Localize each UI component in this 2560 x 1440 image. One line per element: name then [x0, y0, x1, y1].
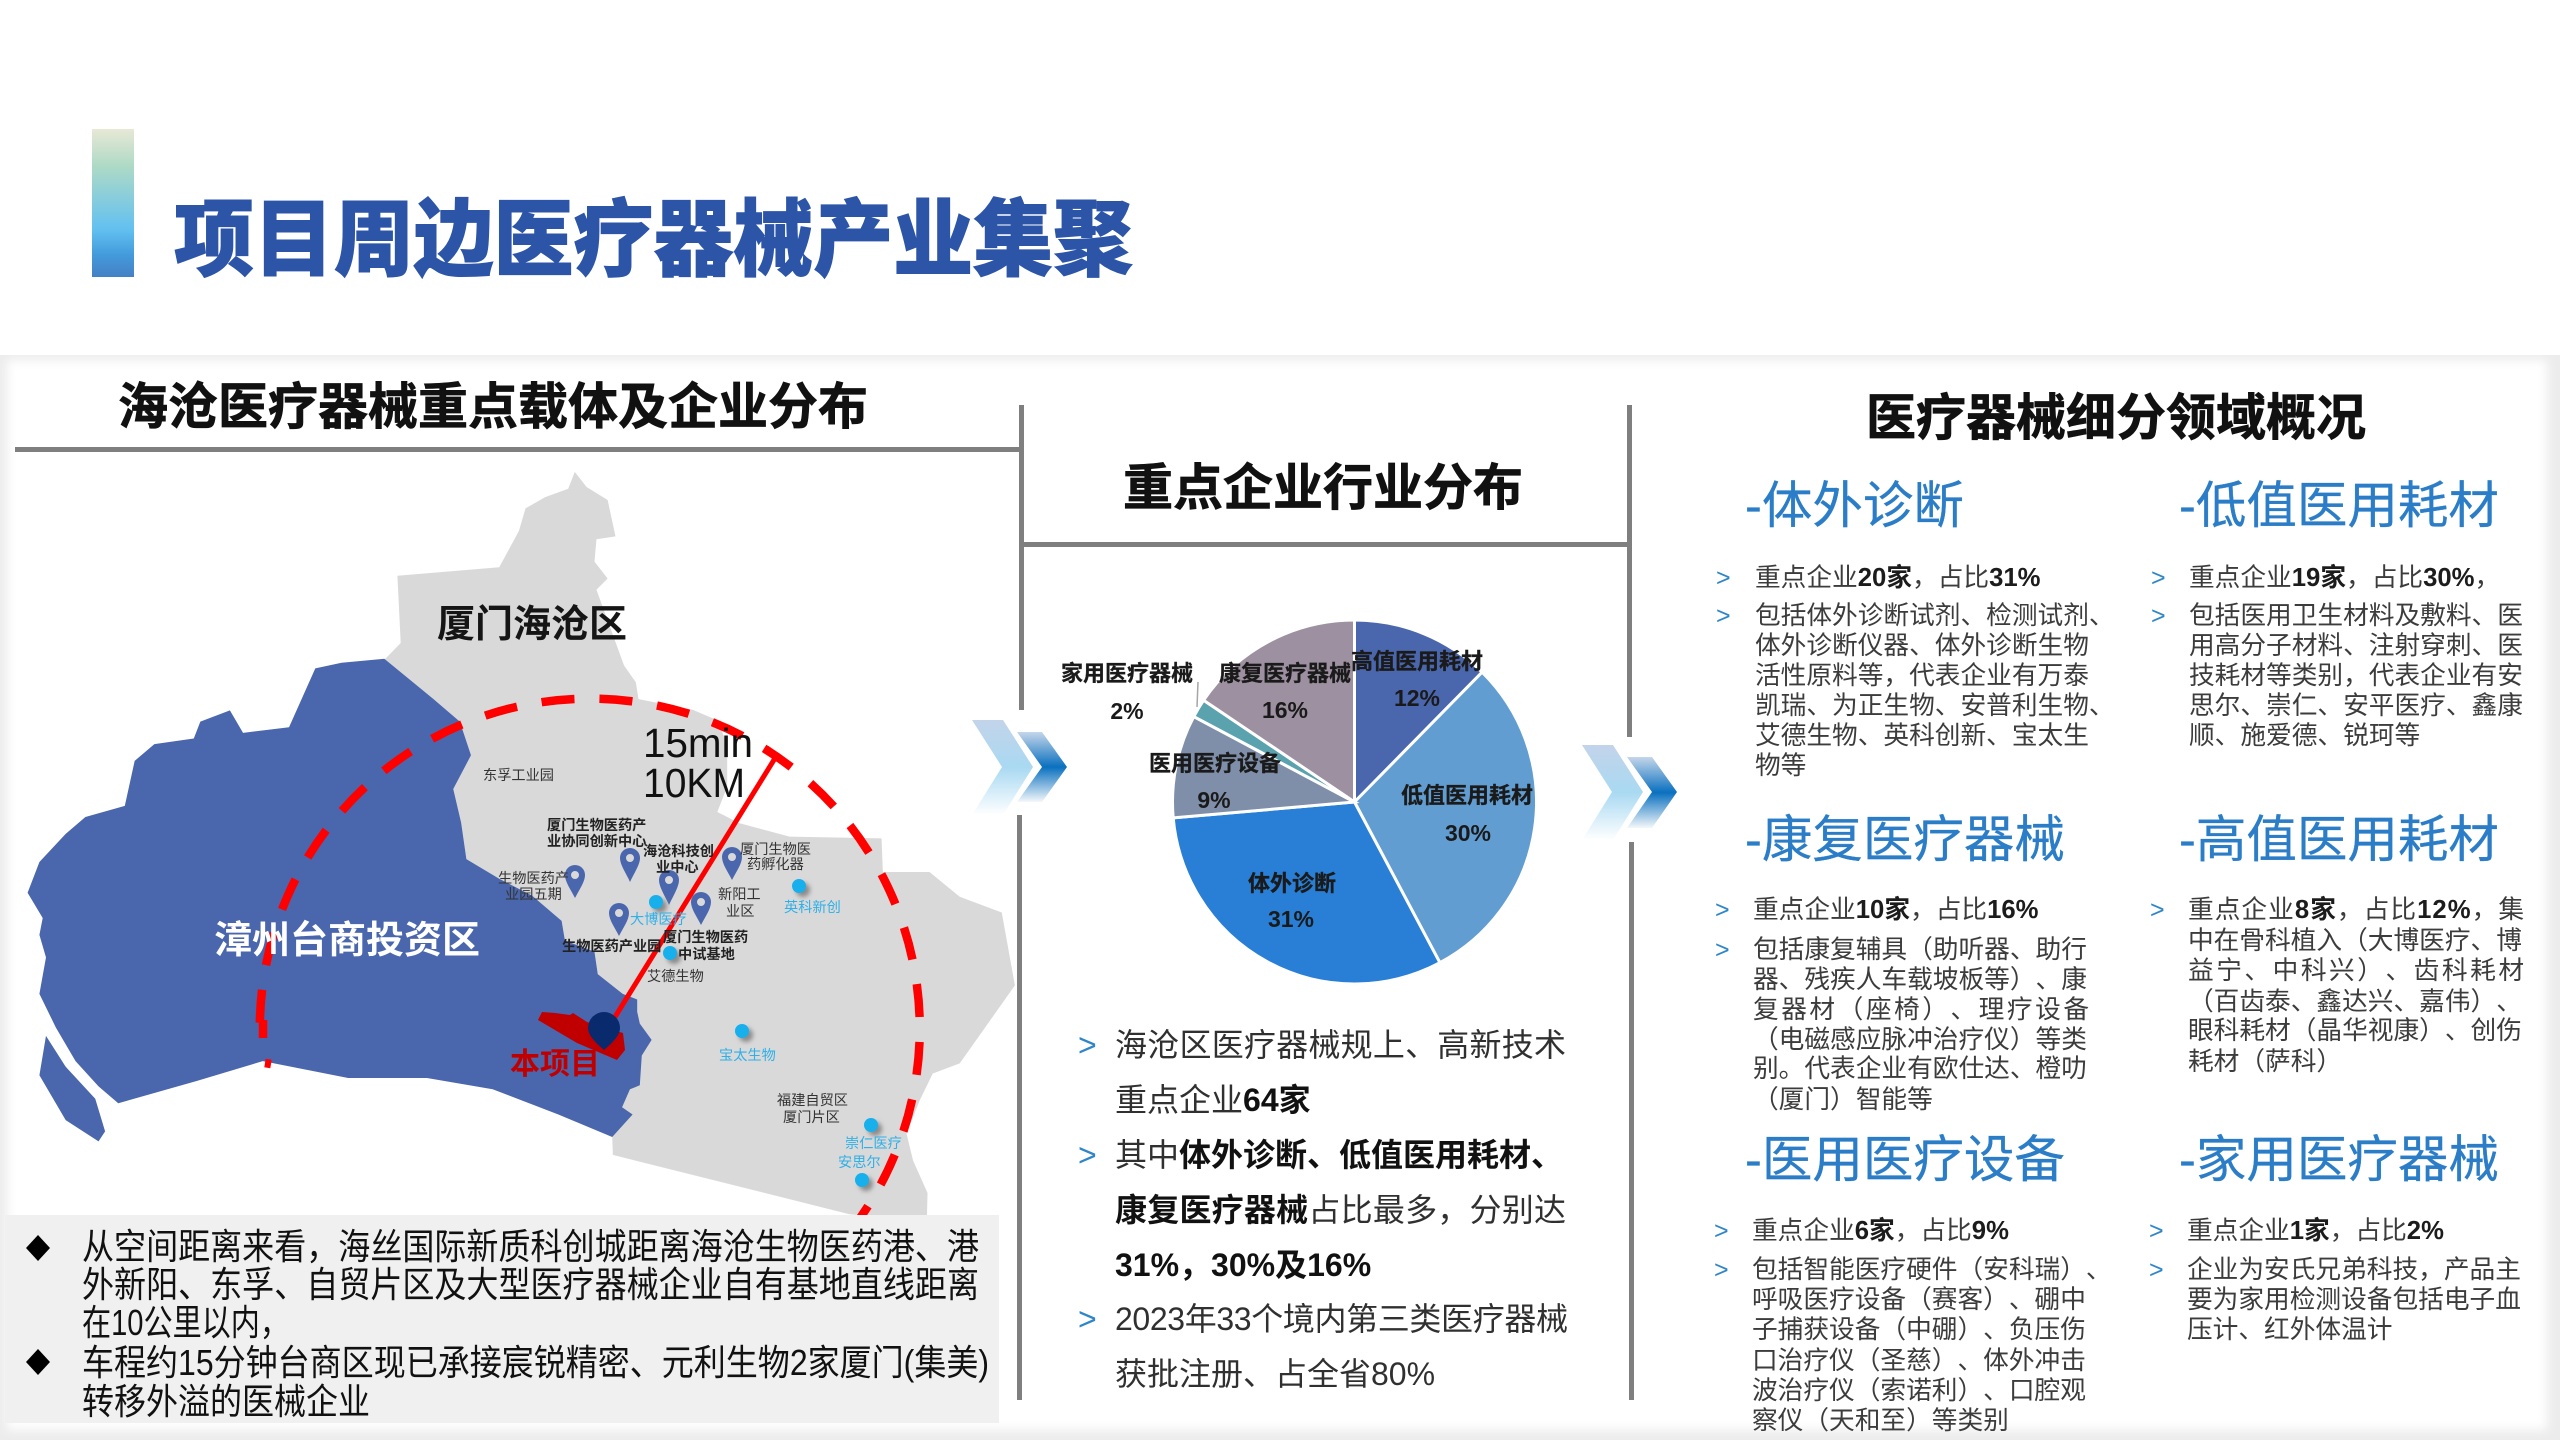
radius line [615, 748, 788, 1017]
segment: high-value consumables: 益宁、中科兴）、齿科耗材 [2188, 956, 2524, 985]
segment: medical equipment: 重点企业6家，占比9% [1752, 1216, 2009, 1245]
segment: medical equipment: > [1714, 1217, 1729, 1245]
pie labels: 家用医疗器械 [1061, 661, 1193, 686]
enterprise dots [649, 879, 882, 1191]
arrow: map to distribution [972, 720, 1067, 815]
map place labels: 中试基地 [678, 946, 735, 963]
summary lines: 在10公里以内， [82, 1302, 289, 1343]
distance label [643, 720, 753, 806]
distance label: 15min [643, 720, 753, 766]
distribution bullet markers [1078, 1027, 1097, 1337]
project label: 本项目 [510, 1048, 600, 1081]
segment: in-vitro diagnostics: 体外诊断仪器、体外诊断生物 [1755, 631, 2089, 660]
pie labels: 2% [1110, 698, 1144, 724]
pie labels: 医用医疗设备 [1149, 751, 1281, 776]
region: Zhangzhou Taiwanese investment zone [28, 659, 652, 1137]
segment: low-value consumables: -低值医用耗材 [2179, 477, 2499, 534]
segment: high-value consumables: （百齿泰、鑫达兴、嘉伟）、 [2188, 987, 2522, 1016]
segment: in-vitro diagnostics [1716, 477, 2115, 780]
bullet diamonds [26, 1235, 50, 1375]
distribution text: 海沧区医疗器械规上、高新技术 [1115, 1027, 1566, 1063]
map place labels: 药孵化器 [747, 857, 804, 873]
segment: in-vitro diagnostics: 凯瑞、为正生物、安普利生物、 [1755, 691, 2115, 720]
map place labels: 艾德生物 [647, 969, 704, 985]
segment: medical equipment: 察仪（天和至）等类别 [1752, 1406, 2009, 1435]
map place labels: 海沧科技创 [643, 843, 714, 860]
distribution text: 重点企业64家 [1115, 1082, 1311, 1118]
panel: segment overview [1714, 390, 2524, 1435]
segment: rehabilitation devices: 别。代表企业有欧仕达、橙叻 [1753, 1054, 2087, 1083]
segment: rehabilitation devices: 复器材（座椅）、理疗设备 [1753, 995, 2089, 1024]
segment: in-vitro diagnostics: -体外诊断 [1745, 477, 1964, 534]
map place labels: 业园五期 [505, 887, 562, 903]
project site shape [538, 1012, 625, 1060]
segment: medical equipment: 呼吸医疗设备（赛客）、硼中 [1752, 1285, 2086, 1314]
pie labels: 30% [1445, 820, 1491, 846]
map regions [28, 472, 1015, 1215]
segment: home devices: 压计、红外体温计 [2187, 1315, 2392, 1344]
distribution bullet markers: > [1078, 1137, 1097, 1173]
panel: enterprise industry distribution [1061, 460, 1568, 1392]
segment heading: 医疗器械细分领域概况 [1866, 390, 2366, 446]
segment: in-vitro diagnostics: > [1716, 602, 1731, 630]
segment: low-value consumables: > [2151, 602, 2166, 630]
segment: low-value consumables: 技耗材等类别，代表企业有安 [2189, 661, 2523, 690]
segment: home devices: > [2149, 1256, 2164, 1284]
map place labels: 厦门生物医药产 [547, 817, 646, 834]
map label: Haicang district: 厦门海沧区 [437, 604, 627, 646]
segment: in-vitro diagnostics: 物等 [1755, 751, 1806, 780]
segment: rehabilitation devices: （厦门）智能等 [1753, 1085, 1933, 1114]
map place labels: 厦门片区 [783, 1110, 840, 1126]
distribution heading: 重点企业行业分布 [1123, 460, 1523, 516]
distribution text [1115, 1027, 1568, 1392]
pie labels: 31% [1268, 906, 1314, 932]
map place labels: 厦门生物医 [740, 842, 811, 858]
segment: low-value consumables: 思尔、崇仁、安平医疗、鑫康 [2189, 691, 2523, 720]
15-minute radius dashed circle [260, 699, 920, 1225]
segment: high-value consumables [2150, 811, 2524, 1076]
segment: high-value consumables: 中在骨科植入（大博医疗、博 [2188, 926, 2522, 955]
map place labels: 英科新创 [784, 899, 841, 916]
segment: rehabilitation devices: -康复医疗器械 [1745, 811, 2065, 868]
location pins [565, 847, 742, 936]
distribution text: 获批注册、占全省80% [1115, 1356, 1435, 1392]
segment: medical equipment: -医用医疗设备 [1745, 1131, 2065, 1188]
map place labels: 东孚工业园 [483, 768, 554, 784]
map place labels: 业中心 [656, 859, 699, 876]
segment: medical equipment: 包括智能医疗硬件（安科瑞）、 [1752, 1255, 2112, 1284]
segment: home devices: 企业为安氏兄弟科技，产品主 [2187, 1255, 2521, 1284]
segment: in-vitro diagnostics: 活性原料等，代表企业有万泰 [1755, 661, 2089, 690]
map place labels: 大博医疗 [630, 911, 687, 928]
segment: low-value consumables: > [2151, 564, 2166, 592]
segment: rehabilitation devices: 器、残疾人车载坡板等）、康 [1753, 965, 2087, 994]
distribution text: 31%，30%及16% [1115, 1247, 1371, 1283]
segment: in-vitro diagnostics: 重点企业20家，占比31% [1755, 563, 2041, 592]
segment: medical equipment: 波治疗仪（索诺利）、口腔观 [1752, 1376, 2086, 1405]
region: Haicang and Xiamen area [384, 472, 1015, 1220]
map place labels: 生物医药产 [498, 871, 569, 887]
distribution text: 其中体外诊断、低值医用耗材、 [1115, 1137, 1563, 1173]
title accent bar [92, 129, 134, 277]
pie labels: 12% [1394, 685, 1440, 711]
arrow: distribution to segments [1582, 745, 1677, 840]
segment: home devices: 重点企业1家，占比2% [2187, 1216, 2444, 1245]
segment: in-vitro diagnostics: 包括体外诊断试剂、检测试剂、 [1755, 601, 2115, 630]
map place labels: 宝太生物 [719, 1048, 776, 1064]
segment: high-value consumables: -高值医用耗材 [2179, 811, 2499, 868]
pie labels: 低值医用耗材 [1401, 783, 1533, 808]
map place labels: 业区 [726, 904, 754, 920]
distribution bullet markers: > [1078, 1027, 1097, 1063]
segment: home devices: 要为家用检测设备包括电子血 [2187, 1285, 2521, 1314]
map place labels [483, 768, 902, 1171]
pie labels: 9% [1197, 787, 1231, 813]
region: small island [39, 1036, 105, 1141]
distance label: 10KM [643, 760, 745, 806]
distribution bullet markers: > [1078, 1301, 1097, 1337]
pie labels: 康复医疗器械 [1219, 661, 1351, 686]
summary lines: 转移外溢的医械企业 [82, 1381, 370, 1422]
segment: high-value consumables: 重点企业8家，占比12%，集 [2188, 895, 2524, 924]
map place labels: 生物医药产业园 [562, 938, 661, 955]
segment: rehabilitation devices: 重点企业10家，占比16% [1753, 895, 2039, 924]
map label: Zhangzhou zone: 漳州台商投资区 [214, 920, 480, 962]
segment: in-vitro diagnostics: > [1716, 564, 1731, 592]
summary lines: 外新阳、东孚、自贸片区及大型医疗器械企业自有基地直线距离 [82, 1264, 979, 1305]
summary lines [82, 1226, 989, 1422]
pie labels: 16% [1262, 697, 1308, 723]
map heading: 海沧医疗器械重点载体及企业分布 [118, 379, 868, 435]
segment: medical equipment: 子捕获设备（中硼）、负压伤 [1752, 1315, 2086, 1344]
pie chart [1173, 620, 1537, 984]
distribution text: 康复医疗器械占比最多，分别达 [1115, 1192, 1566, 1228]
panel: summary text box [5, 1215, 999, 1423]
segment: home devices: > [2149, 1217, 2164, 1245]
pie leader line [1197, 682, 1198, 707]
segment: medical equipment: 口治疗仪（圣慈）、体外冲击 [1752, 1346, 2086, 1375]
map place labels: 厦门生物医药 [663, 929, 748, 946]
map place labels: 业协同创新中心 [547, 833, 646, 850]
segment: low-value consumables: 用高分子材料、注射穿刺、医 [2189, 631, 2523, 660]
summary lines: 车程约15分钟台商区现已承接宸锐精密、元利生物2家厦门(集美) [82, 1342, 989, 1383]
segment: rehabilitation devices: > [1715, 936, 1730, 964]
segment: rehabilitation devices: > [1715, 896, 1730, 924]
segment: rehabilitation devices: 包括康复辅具（助听器、助行 [1753, 935, 2087, 964]
segment: high-value consumables: 耗材（萨科） [2188, 1047, 2342, 1076]
content panel background [0, 355, 2560, 1440]
segment: low-value consumables [2151, 477, 2523, 750]
segment: high-value consumables: > [2150, 896, 2165, 924]
segment: high-value consumables: 眼科耗材（晶华视康）、创伤 [2188, 1016, 2522, 1045]
summary lines: 从空间距离来看，海丝国际新质科创城距离海沧生物医药港、港 [82, 1226, 979, 1267]
segment: home devices [2149, 1131, 2521, 1344]
panel: map of carriers and enterprises [28, 379, 1015, 1225]
segment: in-vitro diagnostics: 艾德生物、英科创新、宝太生 [1755, 721, 2089, 750]
segment: low-value consumables: 顺、施爱德、锐珂等 [2189, 721, 2420, 750]
pie labels: 高值医用耗材 [1351, 649, 1483, 674]
segment: rehabilitation devices [1715, 811, 2089, 1114]
segment: home devices: -家用医疗器械 [2179, 1131, 2499, 1188]
project location pin [588, 1012, 620, 1050]
map place labels: 安思尔 [838, 1155, 881, 1171]
map place labels: 新阳工 [718, 887, 761, 903]
segment: low-value consumables: 包括医用卫生材料及敷料、医 [2189, 601, 2523, 630]
title: 项目周边医疗器械产业集聚 [174, 193, 1133, 287]
segment: low-value consumables: 重点企业19家，占比30%， [2189, 563, 2500, 592]
pie labels [1061, 649, 1533, 932]
segment: rehabilitation devices: （电磁感应脉冲治疗仪）等类 [1753, 1025, 2087, 1054]
map place labels: 崇仁医疗 [845, 1136, 902, 1152]
distribution text: 2023年33个境内第三类医疗器械 [1115, 1301, 1568, 1337]
map place labels: 福建自贸区 [777, 1093, 848, 1109]
pie labels: 体外诊断 [1248, 871, 1336, 896]
segment: medical equipment [1714, 1131, 2112, 1435]
divider lines [15, 405, 1634, 1400]
segment: medical equipment: > [1714, 1256, 1729, 1284]
